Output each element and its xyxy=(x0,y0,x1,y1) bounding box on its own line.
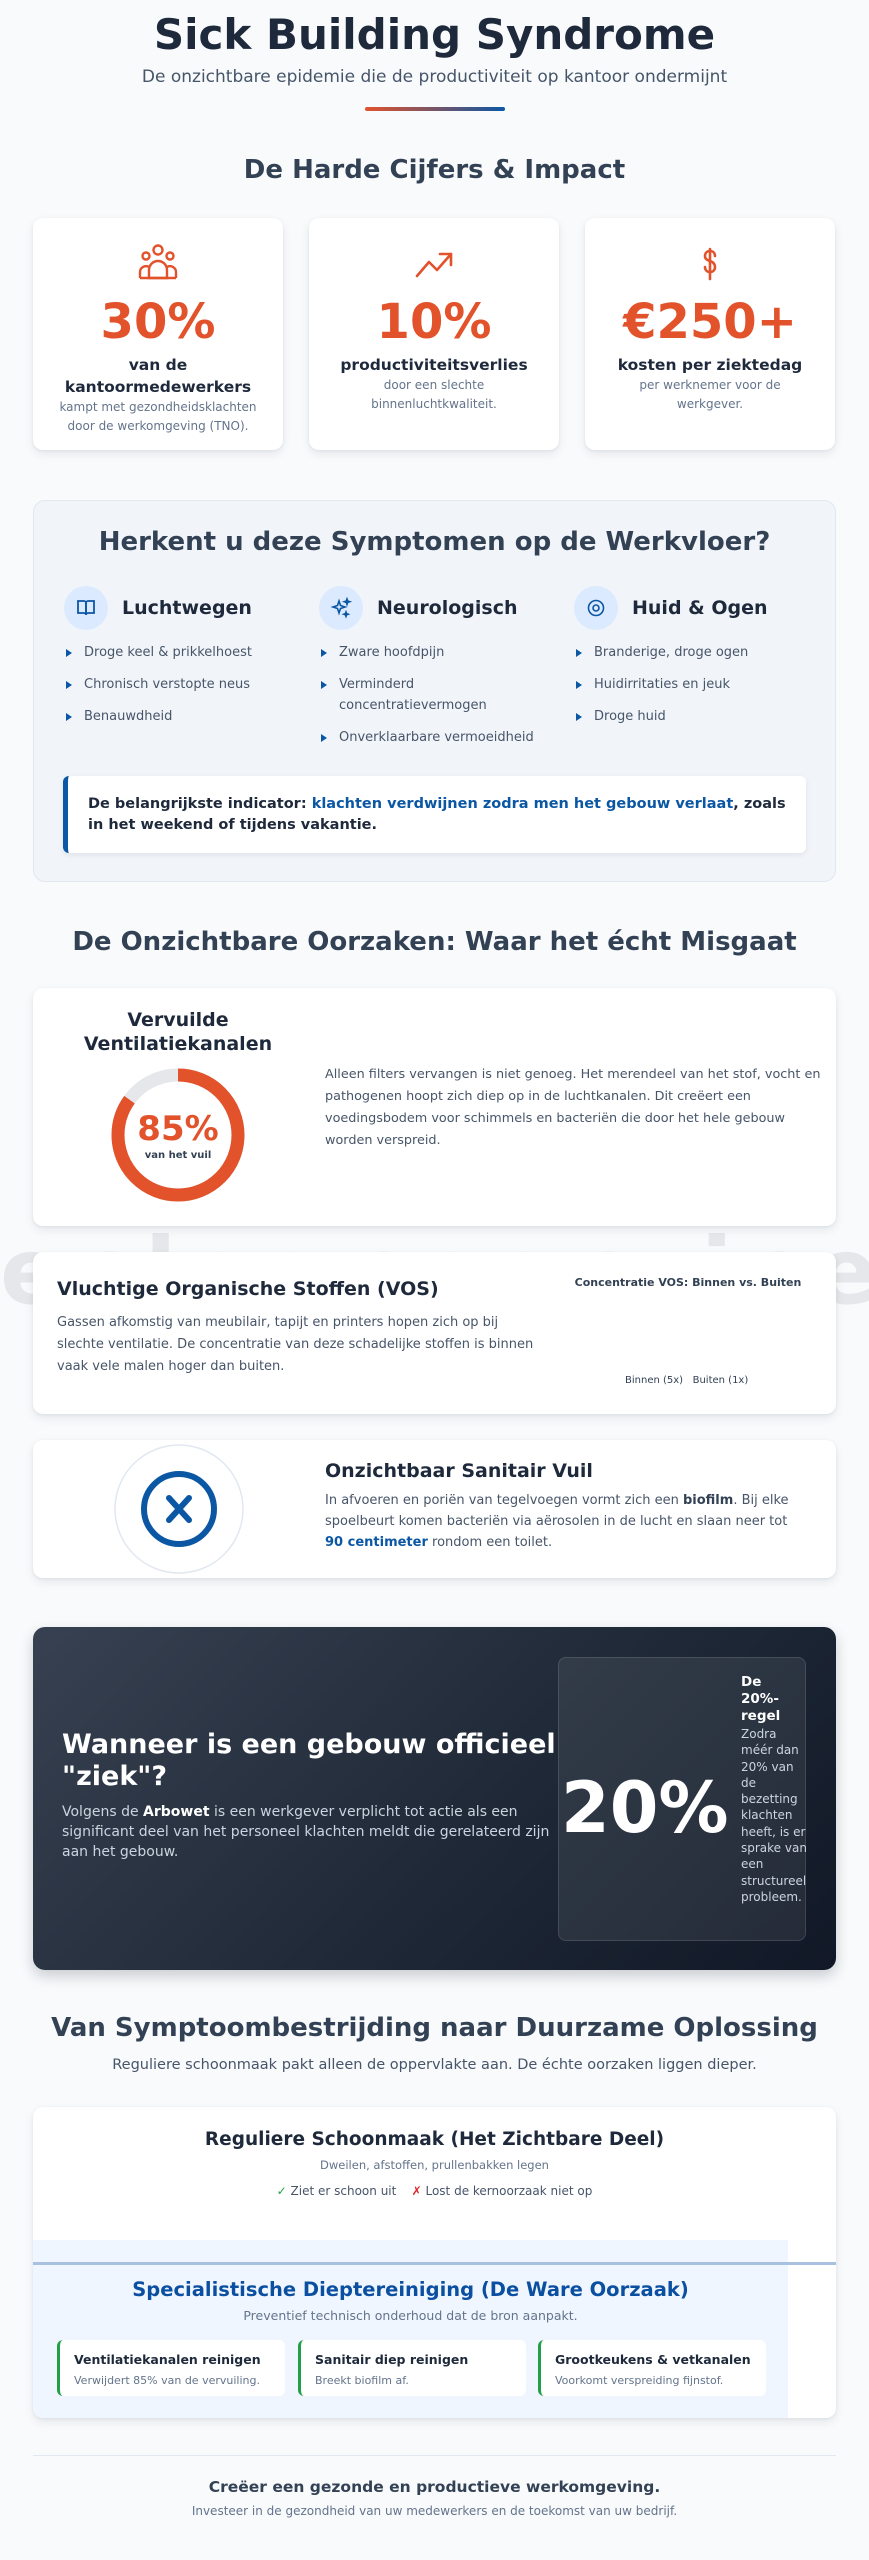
heading: vervuilde ventilatiekanalen xyxy=(84,1009,272,1055)
column: neurologisch: Neurologisch xyxy=(377,597,518,619)
block: specialistische dieptereiniging: Preventief technisch onderhoud dat de bron aanpakt. xyxy=(243,2308,578,2323)
callout: indicator: De belangrijkste indicator: klachten verdwijnen zodra men het gebouw verlaat, zoals in het weekend of tijdens vakantie. xyxy=(88,796,786,833)
stat card: 250 xyxy=(585,218,835,450)
subtitle: De onzichtbare epidemie die de productiviteit op kantoor ondermijnt xyxy=(142,67,727,87)
icon: blue x circle xyxy=(114,1444,244,1574)
accent bar xyxy=(365,107,505,111)
callout: 20% regel: Zodra méér dan 20% van de bezetting klachten heeft, is er sprake van een structureel probleem. xyxy=(741,1727,807,1904)
column: luchtwegen: Droge keel & prikkelhoest xyxy=(84,645,252,660)
heading: harde cijfers: De Harde Cijfers & Impact xyxy=(244,155,625,185)
heading: vervuilde ventilatiekanalen: Ventilatiekanalen xyxy=(84,1033,272,1055)
card: ventilatiekanalen xyxy=(33,988,836,1226)
panel: arbowet xyxy=(33,1627,836,1970)
card: schoonmaak vergelijking xyxy=(33,2107,836,2418)
text: sanitair: In afvoeren en poriën van tegelvoegen vormt zich een biofilm. Bij elke spoelbeurt komen bacteriën via aërosolen in de lucht en slaan neer tot 90 centimeter rondom een toilet. xyxy=(325,1493,789,1550)
subtitle: oplossing: Reguliere schoonmaak pakt alleen de oppervlakte aan. De échte oorzaken liggen dieper. xyxy=(112,2057,757,2073)
stat card: 250: €250+ xyxy=(623,294,797,350)
callout: 20% regel: De 20%-regel xyxy=(741,1674,780,1724)
stat card: 30%: van de xyxy=(129,356,187,374)
stat card: 30% xyxy=(33,218,283,450)
donut chart 85%: van het vuil xyxy=(145,1150,211,1161)
stat card: 250: werkgever. xyxy=(677,397,743,411)
stat card: 30%: kampt met gezondheidsklachten xyxy=(59,400,257,414)
callout: 20% regel: 20% xyxy=(561,1767,729,1849)
text: VOS: Gassen afkomstig van meubilair, tapijt en printers hopen zich op bij slechte ventilatie. De concentratie van deze schadelijke stoffen is binnen vaak vele malen hoger dan buiten. xyxy=(57,1315,533,1374)
donut chart 85% xyxy=(112,1068,244,1202)
stat card: 250: kosten per ziektedag xyxy=(618,356,802,374)
column: huid en ogen: Branderige, droge ogen xyxy=(594,645,748,660)
stat card: 30%: kantoormedewerkers xyxy=(65,378,251,396)
heading: VOS: Vluchtige Organische Stoffen (VOS) xyxy=(57,1278,439,1300)
heading: oorzaken: De Onzichtbare Oorzaken: Waar het écht Misgaat xyxy=(72,927,797,957)
donut chart 85%: 85% xyxy=(137,1109,219,1149)
stat card: 10%: binnenluchtkwaliteit. xyxy=(371,397,497,411)
heading: vervuilde ventilatiekanalen: Vervuilde xyxy=(127,1009,229,1031)
block: specialistische dieptereiniging xyxy=(33,2240,788,2418)
heading: symptomen: Herkent u deze Symptomen op de Werkvloer? xyxy=(99,527,770,557)
column: huid en ogen: Droge huid xyxy=(594,709,666,724)
block: reguliere schoonmaak: ✓ Ziet er schoon uit ✗ Lost de kernoorzaak niet op xyxy=(277,2184,592,2198)
chart: VOS concentratie: Concentratie VOS: Binnen vs. Buiten xyxy=(575,1276,801,1289)
column: neurologisch: Zware hoofdpijn xyxy=(339,645,444,660)
block: reguliere schoonmaak: Dweilen, afstoffen, prullenbakken legen xyxy=(320,2158,549,2172)
heading: sanitair: Onzichtbaar Sanitair Vuil xyxy=(325,1460,593,1482)
column: huid en ogen: Huidirritaties en jeuk xyxy=(594,677,730,692)
subcard: ventilatiekanalen xyxy=(57,2340,285,2396)
card: sanitair xyxy=(33,1440,836,1578)
stat card: 10%: 10% xyxy=(377,294,491,350)
subcard: ventilatiekanalen: Ventilatiekanalen reinigen xyxy=(74,2352,261,2367)
text: arbowet: Volgens de Arbowet is een werkgever verplicht tot actie als een significant deel van het personeel klachten meldt die gerelateerd zijn aan het gebouw. xyxy=(62,1804,549,1860)
title: Sick Building Syndrome xyxy=(154,10,715,59)
chart: VOS concentratie: Binnen (5x) Buiten (1x) xyxy=(625,1375,748,1386)
stat card: 30%: 30% xyxy=(101,294,215,350)
panel: symptomen xyxy=(33,500,836,882)
icon: people xyxy=(138,244,178,280)
heading: oplossing: Van Symptoombestrijding naar Duurzame Oplossing xyxy=(51,2013,818,2043)
stat card: 30%: door de werkomgeving (TNO). xyxy=(68,419,248,433)
subcard: grootkeukens xyxy=(538,2340,766,2396)
block: reguliere schoonmaak: Reguliere Schoonmaak (Het Zichtbare Deel) xyxy=(205,2129,664,2150)
subcard: sanitair: Sanitair diep reinigen xyxy=(315,2352,468,2367)
callout: 20% regel xyxy=(558,1657,806,1941)
chart: VOS concentratie xyxy=(575,1276,801,1386)
footer: Creëer een gezonde en productieve werkomgeving. xyxy=(209,2478,660,2496)
icon: trend up xyxy=(416,252,452,278)
column: neurologisch xyxy=(319,586,534,745)
subcard: sanitair xyxy=(298,2340,526,2396)
column: neurologisch: Verminderd concentratievermogen xyxy=(339,677,487,713)
block: specialistische dieptereiniging: Specialistische Dieptereiniging (De Ware Oorzaak) xyxy=(132,2278,689,2301)
block: reguliere schoonmaak xyxy=(205,2129,664,2198)
column: luchtwegen: Benauwdheid xyxy=(84,709,172,724)
heading: ziek: Wanneer is een gebouw officieel "ziek"? xyxy=(62,1729,556,1792)
column: neurologisch: Onverklaarbare vermoeidheid xyxy=(339,730,534,745)
column: luchtwegen xyxy=(64,586,252,724)
subcard: sanitair: Breekt biofilm af. xyxy=(315,2374,409,2387)
stat card: 10%: productiviteitsverlies xyxy=(340,356,528,374)
subcard: ventilatiekanalen: Verwijdert 85% van de vervuiling. xyxy=(74,2374,260,2387)
column: luchtwegen: Luchtwegen xyxy=(122,597,252,619)
callout: indicator xyxy=(63,776,806,853)
stat card: 10% xyxy=(309,218,559,450)
column: huid en ogen: Huid & Ogen xyxy=(632,597,768,619)
column: huid en ogen xyxy=(574,586,768,724)
column: luchtwegen: Chronisch verstopte neus xyxy=(84,677,250,692)
stat card: 10%: door een slechte xyxy=(384,378,484,392)
footer: Investeer in de gezondheid van uw medewerkers en de toekomst van uw bedrijf. xyxy=(192,2504,677,2518)
subcard: grootkeukens: Voorkomt verspreiding fijnstof. xyxy=(555,2374,723,2387)
stat card: 250: per werknemer voor de xyxy=(639,378,781,392)
icon: money xyxy=(704,248,716,280)
text: ventilatie: Alleen filters vervangen is niet genoeg. Het merendeel van het stof, vocht en pathogenen hoopt zich diep op in de luchtkanalen. Dit creëert een voedingsbodem voor schimmels en bacteriën die door het hele gebouw worden verspreid. xyxy=(325,1067,820,1148)
card: VOS xyxy=(33,1252,836,1414)
subcard: grootkeukens: Grootkeukens & vetkanalen xyxy=(555,2352,751,2367)
footer xyxy=(192,2478,677,2518)
